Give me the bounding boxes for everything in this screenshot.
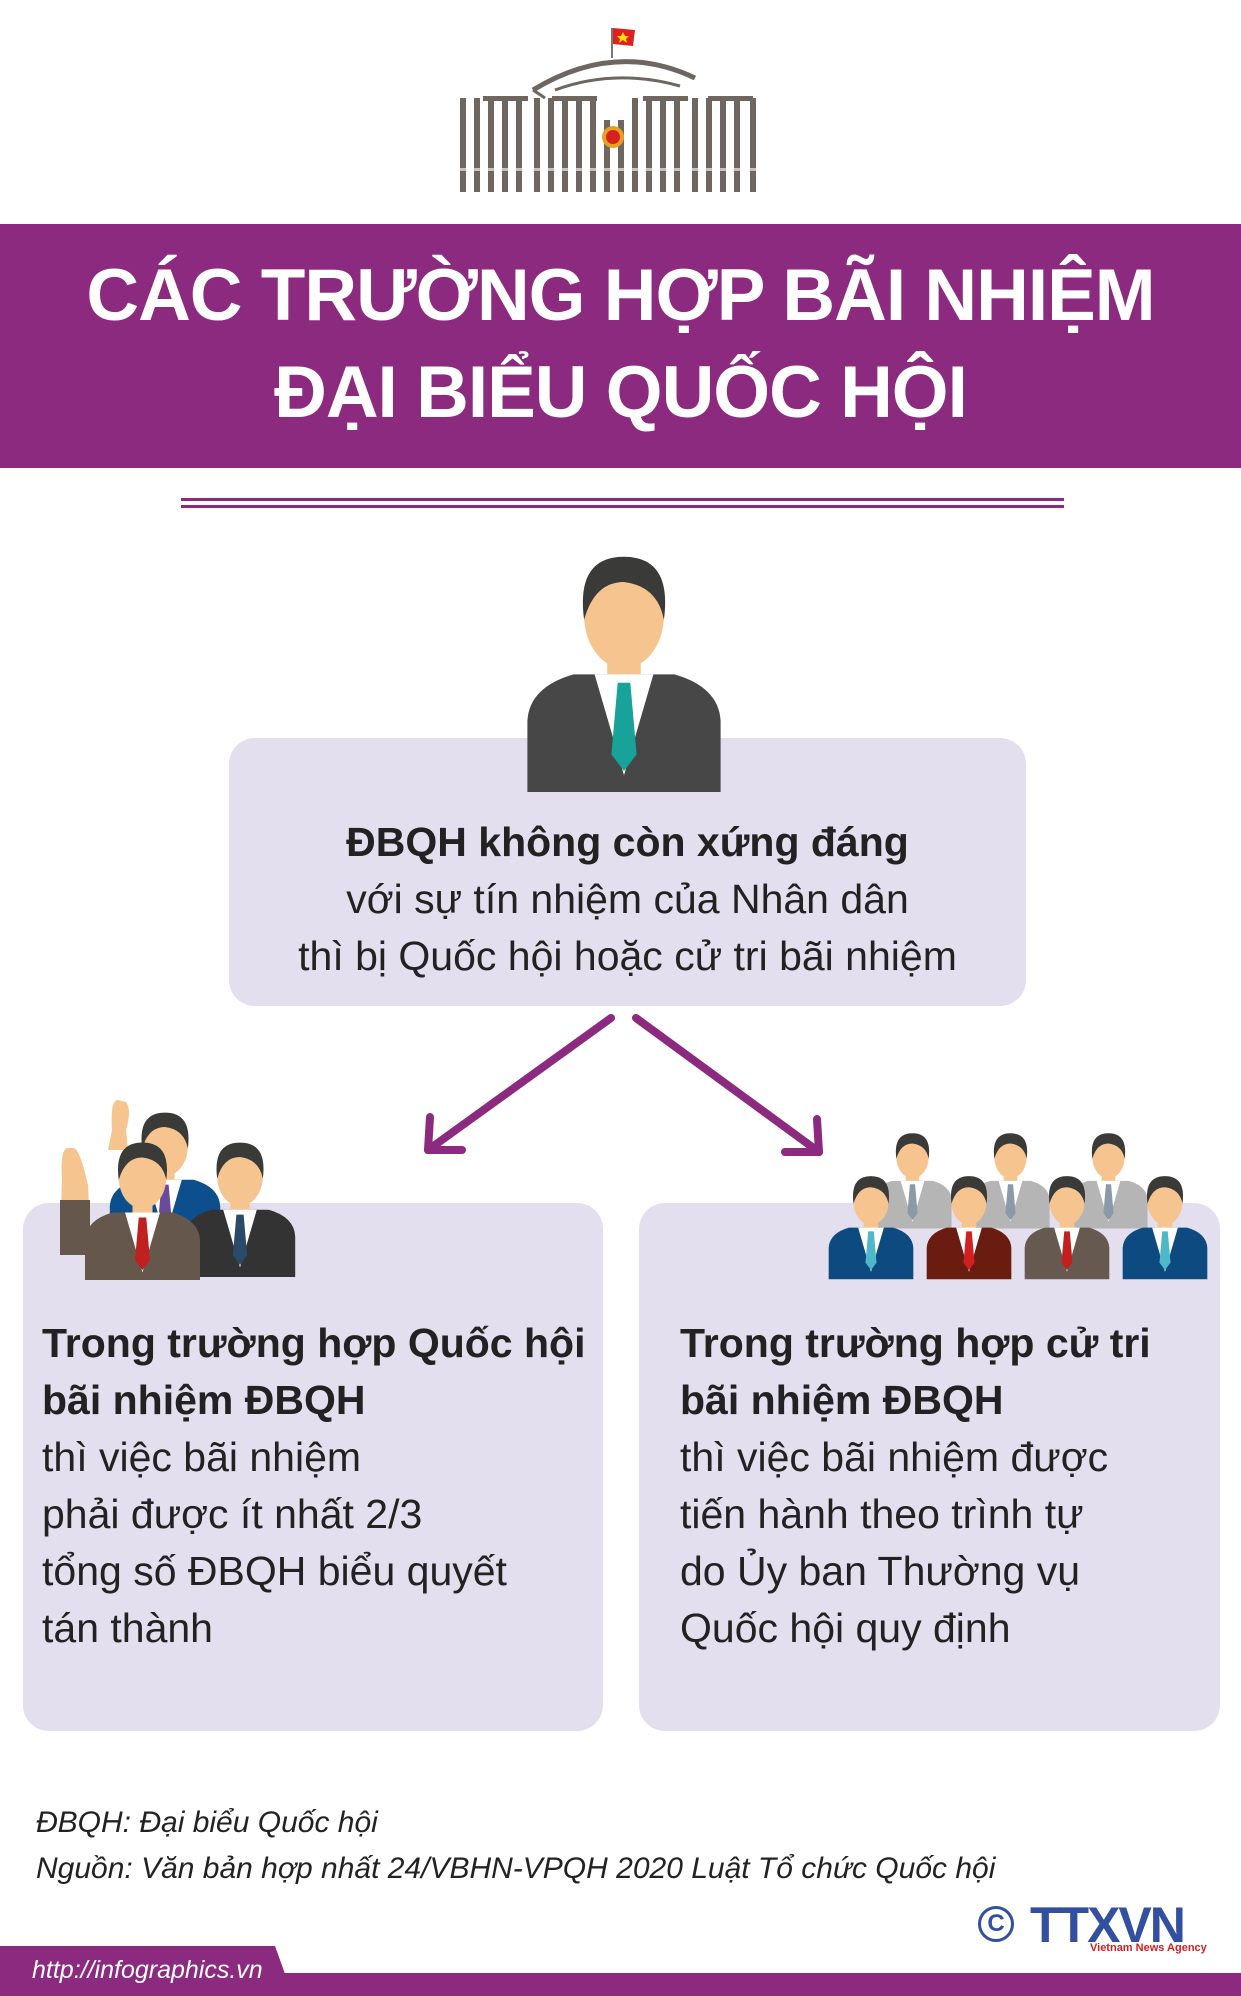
footnote: [36, 1806, 996, 1885]
footer url: http://infographics.vn: [32, 1956, 263, 1984]
text: main statement: thì bị Quốc hội hoặc cử tri bãi nhiệm: [298, 933, 957, 979]
logo: TTXVN: [978, 1897, 1207, 1954]
panel: right: [639, 1203, 1220, 1731]
icon: national assembly building: [460, 28, 756, 192]
icon: deputy person: [527, 556, 721, 792]
text: voters case: thì việc bãi nhiệm được: [680, 1434, 1108, 1480]
footnote: ĐBQH: Đại biểu Quốc hội: [36, 1806, 378, 1839]
logo: TTXVN: Vietnam News Agency: [1090, 1942, 1207, 1954]
text: main statement: [298, 819, 957, 979]
text: voters case: tiến hành theo trình tự: [680, 1491, 1084, 1537]
title: CÁC TRƯỜNG HỢP BÃI NHIỆM: [86, 255, 1155, 336]
logo: TTXVN: TTXVN: [1030, 1897, 1184, 1953]
footnote: Nguồn: Văn bản hợp nhất 24/VBHN-VPQH 2020 Luật Tổ chức Quốc hội: [36, 1852, 995, 1885]
text: voters case: bãi nhiệm ĐBQH: [680, 1377, 1003, 1423]
icon: voting deputies: [60, 1100, 296, 1280]
text: voters case: Trong trường hợp cử tri: [680, 1320, 1151, 1366]
title banner: ĐẠI BIỂU QUỐC HỘI: [274, 352, 967, 433]
text: parliament case: phải được ít nhất 2/3: [42, 1491, 422, 1537]
text: parliament case: Trong trường hợp Quốc hội: [42, 1320, 585, 1366]
text: voters case: [680, 1320, 1151, 1651]
panel: left: [23, 1203, 603, 1731]
top box: [229, 738, 1026, 1006]
title banner: [0, 224, 1241, 468]
logo: TTXVN: C: [987, 1910, 1005, 1937]
footer bar: [0, 1973, 1241, 1996]
text: parliament case: thì việc bãi nhiệm: [42, 1434, 361, 1480]
text: parliament case: tổng số ĐBQH biểu quyết: [42, 1548, 507, 1594]
arrows: [424, 1014, 823, 1156]
text: voters case: Quốc hội quy định: [680, 1605, 1011, 1651]
text: main statement: với sự tín nhiệm của Nhân dân: [346, 876, 909, 922]
text: main statement: ĐBQH không còn xứng đáng: [346, 819, 909, 865]
text: parliament case: tán thành: [42, 1605, 213, 1651]
icon: voters crowd: [828, 1133, 1208, 1280]
text: voters case: do Ủy ban Thường vụ: [680, 1548, 1080, 1594]
text: parliament case: [42, 1320, 585, 1651]
text: parliament case: bãi nhiệm ĐBQH: [42, 1377, 365, 1423]
